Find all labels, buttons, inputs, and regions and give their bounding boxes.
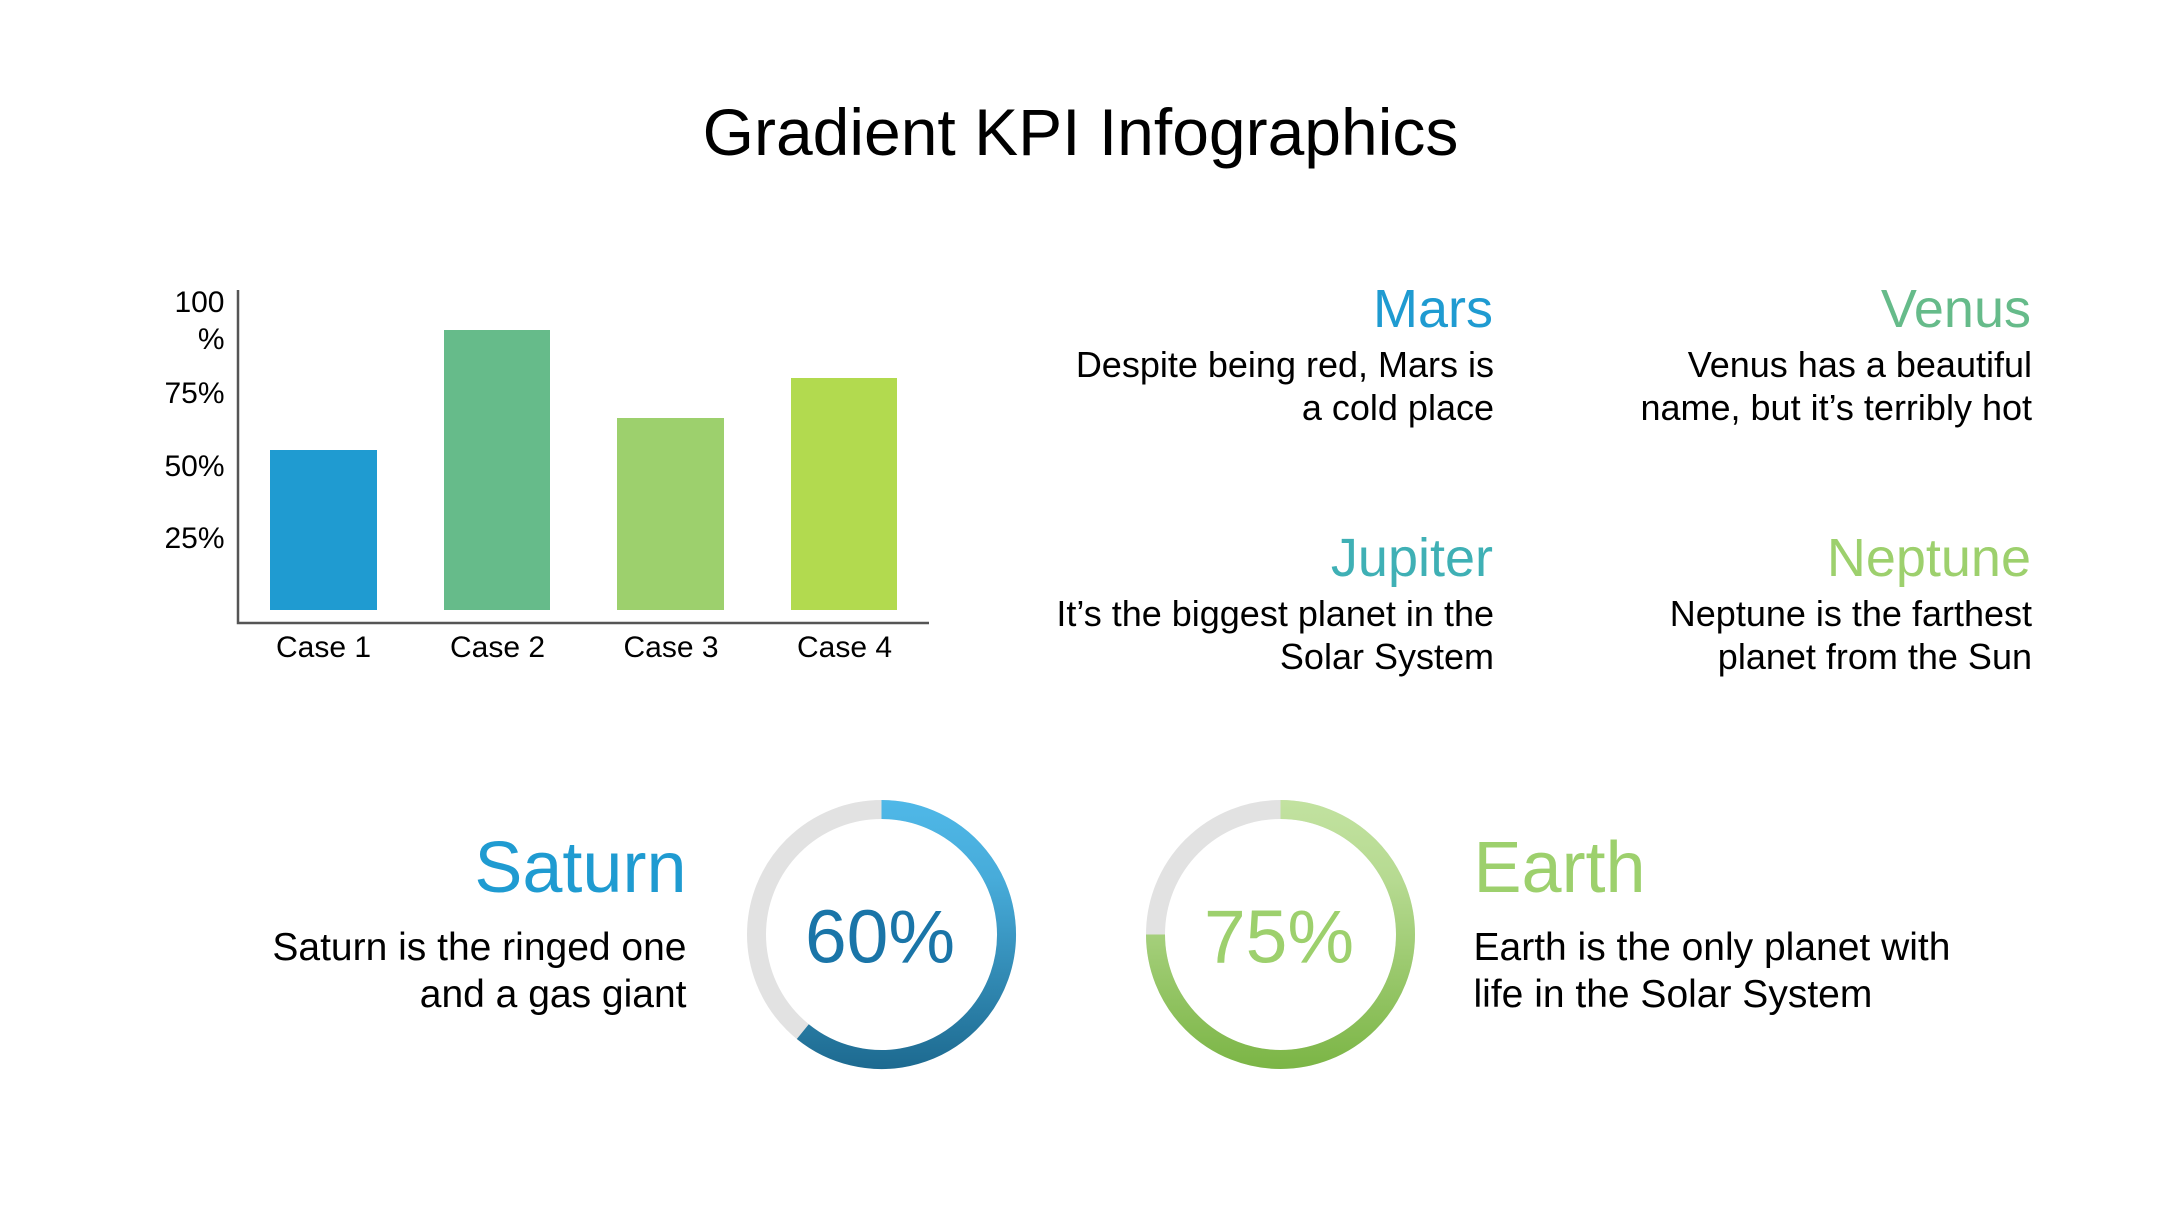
bar: case 4: [791, 378, 897, 610]
text block: Earth: [1474, 828, 1950, 1016]
text block: Jupiter: Jupiter: [1331, 528, 1493, 588]
text block: Neptune: planet from the Sun: [1718, 636, 2032, 677]
text block: Saturn: [272, 828, 687, 1016]
x axis labels: [276, 631, 892, 664]
text block: Venus: name, but it’s terribly hot: [1640, 387, 2032, 428]
bar: case 1: [270, 450, 377, 610]
x axis labels: Case 3: [623, 631, 719, 664]
donut: Earth 75%: [1156, 810, 1406, 1060]
text block: Earth: Earth is the only planet with: [1474, 926, 1950, 969]
text block: Neptune: Neptune: [1827, 528, 2031, 588]
text block: Mars: [1076, 279, 1494, 428]
text block: Jupiter: It’s the biggest planet in the: [1056, 593, 1494, 634]
text block: Mars: Mars: [1373, 279, 1493, 339]
text block: Venus: [1640, 279, 2032, 428]
text block: Neptune: Neptune is the farthest: [1670, 593, 2032, 634]
text block: Saturn: Saturn is the ringed one: [272, 926, 686, 969]
text block: Jupiter: Solar System: [1280, 636, 1494, 677]
y axis labels: 100: [174, 286, 224, 319]
text block: Mars: Despite being red, Mars is: [1076, 344, 1494, 385]
text block: Jupiter: [1056, 528, 1494, 677]
y axis labels: 50%: [164, 450, 224, 483]
x axis labels: Case 2: [450, 631, 545, 664]
text block: Neptune: [1670, 528, 2032, 677]
text block: Earth: Earth: [1474, 828, 1646, 908]
chart axes: [238, 290, 929, 623]
x axis labels: Case 4: [797, 631, 892, 664]
y axis labels: [164, 286, 224, 555]
text block: Earth: life in the Solar System: [1474, 973, 1872, 1016]
y axis labels: 75%: [164, 377, 224, 410]
bar: case 3: [617, 418, 724, 610]
y axis labels: 25%: [164, 522, 224, 555]
text block: Saturn: and a gas giant: [420, 973, 687, 1016]
text block: Saturn: Saturn: [474, 828, 686, 908]
x axis labels: Case 1: [276, 631, 371, 664]
bar chart: [164, 286, 929, 664]
donut: Earth 75%: 75%: [1204, 894, 1354, 978]
text block: Venus: Venus has a beautiful: [1688, 344, 2032, 385]
bar: case 2: [444, 330, 550, 610]
text block: Mars: a cold place: [1302, 387, 1494, 428]
donut: Saturn 60%: 60%: [805, 894, 955, 978]
title: Gradient KPI Infographics: [703, 95, 1458, 169]
text block: Venus: Venus: [1881, 279, 2031, 339]
donut: Saturn 60%: [756, 810, 1007, 1060]
y axis labels: %: [198, 323, 224, 356]
